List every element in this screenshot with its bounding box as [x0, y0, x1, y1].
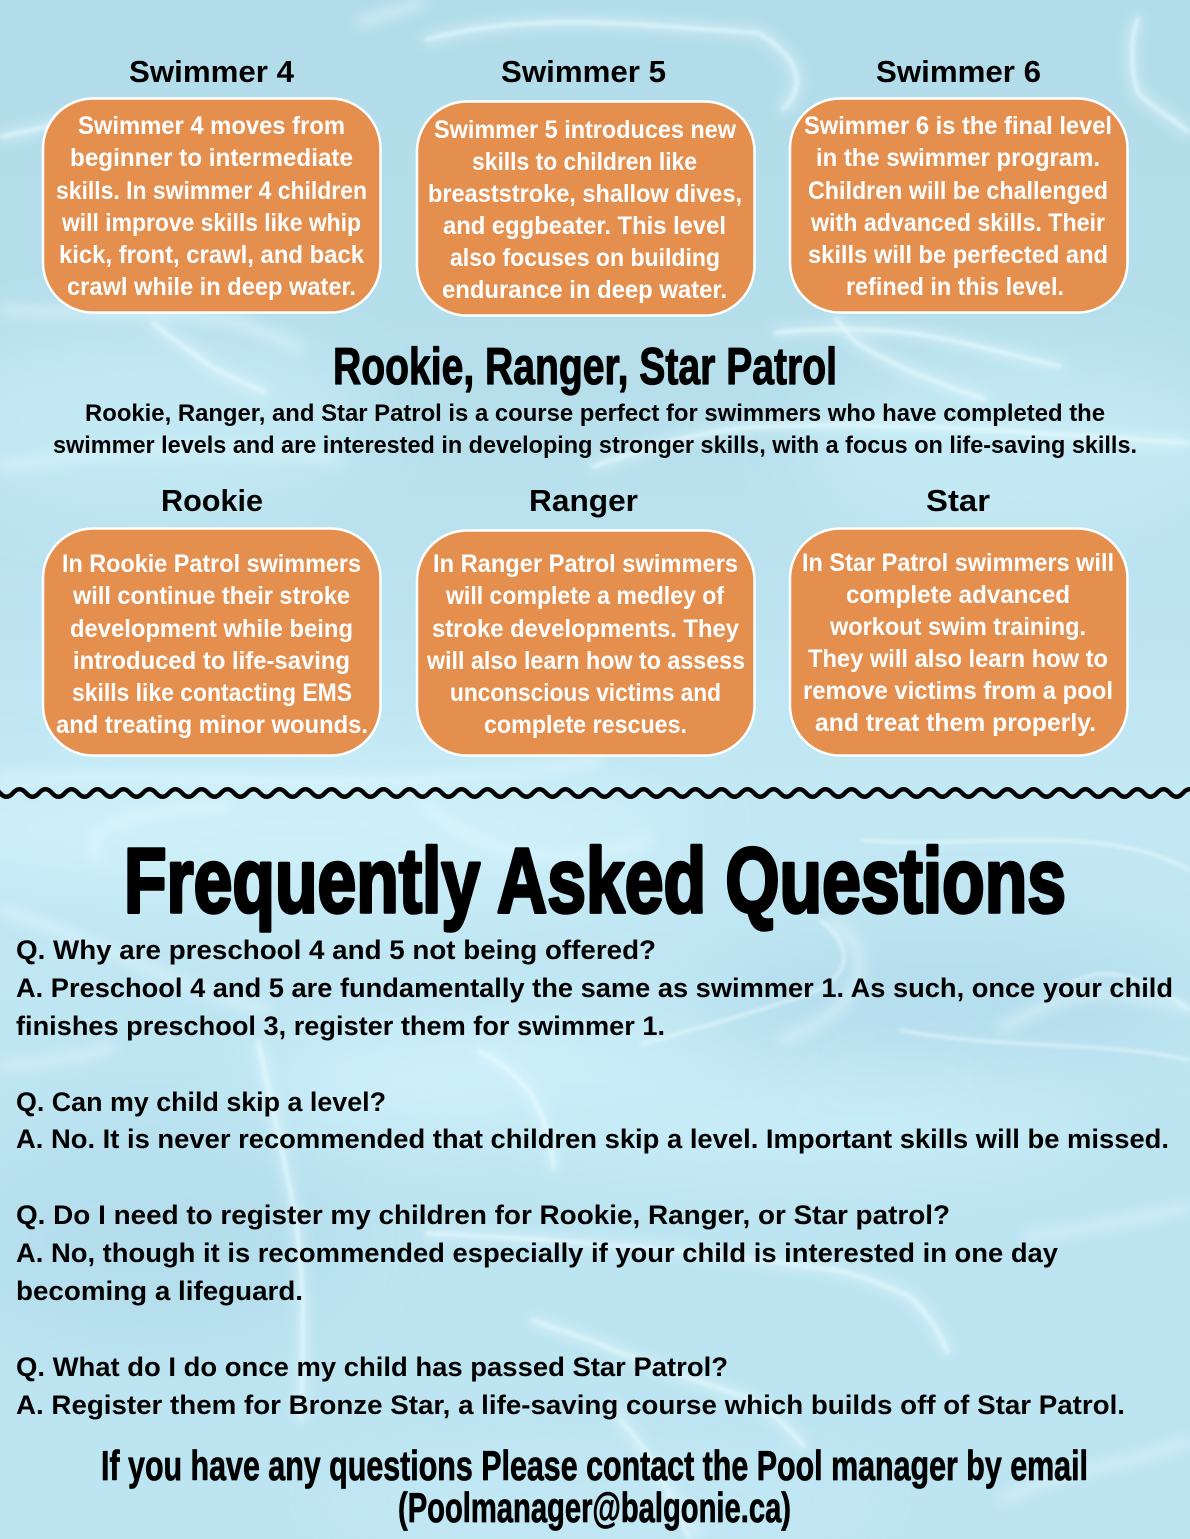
- text block: patrol course introduction: [53, 400, 1137, 459]
- panel: Rookie description: introduced to life-saving: [73, 647, 350, 675]
- panel: Ranger description: will also learn how to assess: [426, 647, 745, 675]
- text block: FAQ after Star Patrol: Q. What do I do once my child has passed Star Patrol?: [16, 1352, 728, 1382]
- panel: Rookie description: and treating minor wounds.: [56, 711, 368, 739]
- panel: Ranger description: will complete a medley of: [445, 582, 725, 610]
- heading: Swimmer 4: Swimmer 4: [129, 54, 295, 89]
- text block: FAQ preschool question: finishes preschool 3, register them for swimmer 1.: [16, 1011, 665, 1041]
- panel: Swimmer 5 description: also focuses on building: [450, 244, 720, 272]
- panel: Rookie description: [43, 528, 380, 756]
- panel: Swimmer 6 description: Children will be challenged: [808, 177, 1108, 205]
- panel: Star description: complete advanced: [846, 581, 1070, 609]
- text block: patrol course introduction: swimmer levels and are interested in developing stronger skills, with a focus on life-saving skills.: [53, 432, 1137, 459]
- panel: Swimmer 4 description: Swimmer 4 moves from: [78, 112, 345, 140]
- panel: Swimmer 4 description: kick, front, crawl, and back: [59, 241, 364, 269]
- panel: Star description: remove victims from a pool: [803, 677, 1113, 705]
- heading: Ranger: Ranger: [529, 483, 638, 518]
- contact note: (Poolmanager@balgonie.ca): [398, 1484, 791, 1531]
- text block: FAQ skipping a level: A. No. It is never recommended that children skip a level. Important skills will be missed.: [16, 1124, 1169, 1154]
- panel: Swimmer 4 description: crawl while in deep water.: [67, 273, 356, 301]
- panel: Swimmer 6 description: skills will be perfected and: [808, 241, 1108, 269]
- panel: Star description: They will also learn how to: [808, 645, 1108, 673]
- panel: Swimmer 5 description: skills to children like: [472, 148, 697, 176]
- text block: FAQ patrol registration: A. No, though it is recommended especially if your child is interested in one day: [16, 1238, 1058, 1268]
- text block: FAQ patrol registration: becoming a lifeguard.: [16, 1276, 303, 1306]
- panel: Ranger description: stroke developments. They: [432, 615, 739, 643]
- panel: Star description: [790, 528, 1128, 756]
- panel: Swimmer 4 description: [43, 98, 380, 312]
- panel: Swimmer 5 description: and eggbeater. This level: [443, 212, 726, 240]
- text block: patrol course introduction: Rookie, Ranger, and Star Patrol is a course perfect for swimmers who have completed the: [85, 400, 1105, 427]
- panel: Rookie description: skills like contacting EMS: [72, 679, 352, 707]
- contact note: [101, 1442, 1088, 1531]
- panel: Star description: In Star Patrol swimmers will: [802, 549, 1114, 577]
- panel: Rookie description: In Rookie Patrol swimmers: [62, 550, 361, 578]
- panel: Ranger description: In Ranger Patrol swimmers: [433, 550, 738, 578]
- panel: Swimmer 6 description: refined in this level.: [846, 273, 1064, 301]
- text block: FAQ preschool question: A. Preschool 4 and 5 are fundamentally the same as swimmer 1. As such, once your child: [16, 973, 1173, 1003]
- panel: Swimmer 5 description: Swimmer 5 introduces new: [434, 116, 737, 144]
- heading: Rookie: Rookie: [161, 483, 263, 518]
- text block: FAQ preschool question: Q. Why are preschool 4 and 5 not being offered?: [16, 935, 656, 965]
- panel: Swimmer 4 description: beginner to intermediate: [70, 144, 353, 172]
- panel: Swimmer 5 description: endurance in deep water.: [442, 276, 727, 304]
- text block: FAQ skipping a level: [16, 1087, 1169, 1154]
- heading: Swimmer 6: Swimmer 6: [876, 54, 1041, 89]
- panel: Swimmer 6 description: [790, 98, 1128, 312]
- panel: Swimmer 4 description: will improve skills like whip: [61, 209, 361, 237]
- panel: Star description: and treat them properly.: [815, 709, 1096, 737]
- text block: FAQ skipping a level: Q. Can my child skip a level?: [16, 1087, 386, 1117]
- text block: FAQ preschool question: [16, 935, 1173, 1041]
- panel: Rookie description: will continue their stroke: [72, 582, 350, 610]
- heading: Swimmer 5: Swimmer 5: [501, 54, 666, 89]
- panel: Ranger description: unconscious victims and: [450, 679, 721, 707]
- panel: Star description: workout swim training.: [829, 613, 1086, 641]
- text block: FAQ patrol registration: Q. Do I need to register my children for Rookie, Ranger, or Star patrol?: [16, 1200, 950, 1230]
- panel: Swimmer 6 description: Swimmer 6 is the final level: [804, 112, 1112, 140]
- wavy section divider: [0, 789, 1190, 797]
- title: Rookie, Ranger, Star Patrol: Rookie, Ranger, Star Patrol: [333, 338, 837, 396]
- panel: Swimmer 5 description: [417, 102, 754, 316]
- text block: FAQ after Star Patrol: [16, 1352, 1125, 1420]
- panel: Rookie description: development while being: [70, 615, 353, 643]
- panel: Swimmer 5 description: breaststroke, shallow dives,: [428, 180, 742, 208]
- text block: FAQ after Star Patrol: A. Register them for Bronze Star, a life-saving course which builds off of Star Patrol.: [16, 1390, 1125, 1420]
- panel: Ranger description: complete rescues.: [484, 711, 687, 739]
- heading: Star: Star: [926, 483, 990, 518]
- panel: Ranger description: [417, 530, 754, 756]
- text block: FAQ patrol registration: [16, 1200, 1058, 1306]
- panel: Swimmer 6 description: with advanced skills. Their: [810, 209, 1105, 237]
- panel: Swimmer 4 description: skills. In swimmer 4 children: [56, 177, 367, 205]
- panel: Swimmer 6 description: in the swimmer program.: [816, 144, 1100, 172]
